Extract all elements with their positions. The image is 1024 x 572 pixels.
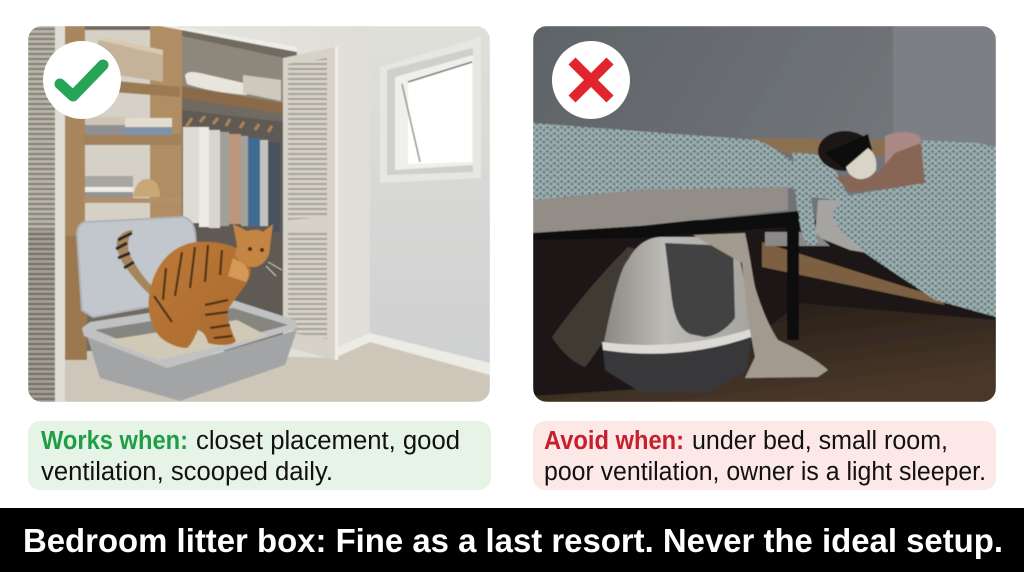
sheet and pillow <box>764 152 864 254</box>
mattress <box>533 187 788 233</box>
orange tabby cat <box>116 224 282 348</box>
near bed duvet <box>533 123 818 245</box>
room walls <box>182 26 490 364</box>
dark under-bed area and wooden floor <box>533 220 996 402</box>
grey litter box with open lid <box>77 217 298 401</box>
caption: avoid when: under bed, small room, <box>692 427 948 455</box>
caption: works when: ventilation, scooped daily. <box>41 458 333 486</box>
caption: works when <box>28 421 491 490</box>
speckled duvet over sleeper <box>832 140 996 317</box>
black bed frame <box>533 211 799 340</box>
left louvered door <box>28 26 65 402</box>
icon: red cross badge <box>552 41 630 119</box>
icon: green check badge <box>43 41 121 119</box>
shelf items: storage box, pillows, folded clothes, hat <box>85 38 281 198</box>
window <box>380 37 481 183</box>
bottom banner: Bedroom litter box: Fine as a last resort. Never the ideal setup. <box>23 522 1003 559</box>
panel: good closet placement photo <box>28 26 490 402</box>
right louvered closet door <box>283 47 338 360</box>
carpet floor and baseboard <box>60 333 490 402</box>
towel draped over box <box>693 233 828 378</box>
draped blanket behind box <box>552 247 640 367</box>
hanging clothes <box>183 116 280 232</box>
bottom banner <box>0 508 1024 572</box>
caption: avoid when: poor ventilation, owner is a light sleeper. <box>544 458 986 486</box>
dark wooden base behind box <box>65 236 87 360</box>
caption: avoid when <box>533 421 996 490</box>
caption: works when: closet placement, good <box>196 427 460 455</box>
panel: bad under-bed placement photo <box>533 26 996 402</box>
wooden bed frame <box>750 138 945 305</box>
hooded litter box <box>602 237 755 392</box>
caption: works when: Works when: <box>41 427 188 455</box>
dim bedroom wall <box>533 26 996 221</box>
sleeping person with eye mask <box>818 131 925 192</box>
caption: avoid when: Avoid when: <box>544 427 684 455</box>
closet shelving and interior <box>65 26 297 360</box>
